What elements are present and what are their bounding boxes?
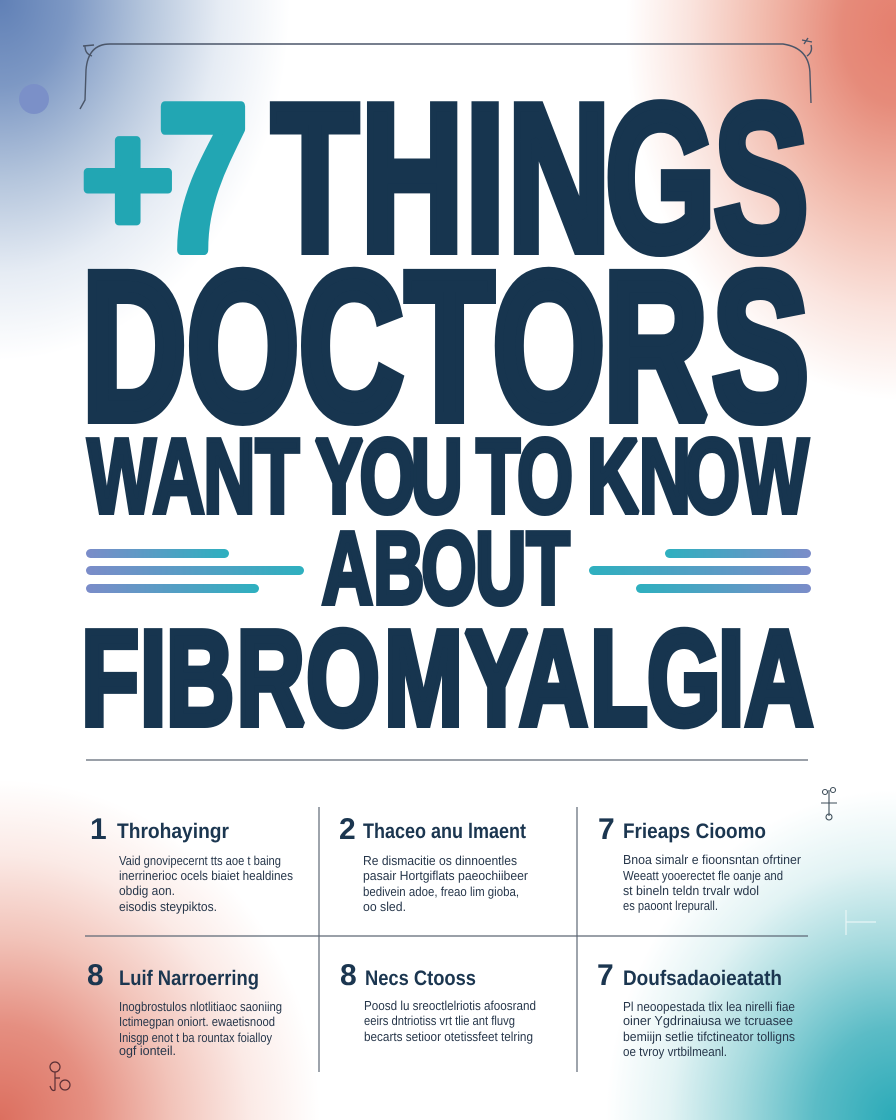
card 1 <box>90 813 293 914</box>
card 6 body text: Pl neoopestada tlix lea nirelli fiae <box>623 999 795 1014</box>
card 1 body text <box>119 853 293 914</box>
title: plus sign: + <box>81 89 174 268</box>
card 1 body text: inerrinerioc ocels biaiet healdines <box>119 868 293 883</box>
card 2 body text: oo sled. <box>363 899 406 914</box>
card 3 body text <box>623 852 802 913</box>
card 1 number: 1 <box>90 813 107 846</box>
decorative white cross <box>846 910 876 935</box>
card 2 heading: Thaceo anu lmaent <box>363 820 526 843</box>
card 5 body text: becarts setioor otetissfeet telring <box>364 1029 533 1044</box>
title: THINGS: THINGS <box>272 62 808 295</box>
title: seven: 7 <box>158 62 248 295</box>
top frame line with ornaments <box>80 38 812 109</box>
title: ABOUT: ABOUT <box>322 510 570 626</box>
card 6 <box>597 959 795 1059</box>
card 2 body text: bedivein adoe, freao lim gioba, <box>363 884 519 899</box>
title: DOCTORS: DOCTORS <box>82 231 808 463</box>
card 3 heading: Frieaps Cioomo <box>623 820 766 843</box>
card 4 <box>87 959 282 1058</box>
card 3 body text: st bineln teldn trvalr wdol <box>623 883 759 898</box>
card 3 body text: es paoont lrepurall. <box>623 898 718 913</box>
title: FIBROMYALGIA: FIBROMYALGIA <box>81 602 813 754</box>
right accent bars <box>589 549 811 593</box>
card 4 body text: Ictimegpan oniort. ewaetisnood <box>119 1014 275 1029</box>
card 6 body text: bemiijn setlie tifctineator tolligns <box>623 1029 795 1044</box>
card 6 body text: oe tvroy vrtbilmeanl. <box>623 1044 727 1059</box>
card 3 number: 7 <box>598 813 615 846</box>
card 4 body text: ogf ionteil. <box>119 1043 176 1058</box>
card 1 body text: obdig aon. <box>119 883 175 898</box>
card 3 <box>598 813 802 913</box>
title <box>81 62 813 754</box>
card 4 number: 8 <box>87 959 104 992</box>
card 2 body text: pasair Hortgiflats paeochiibeer <box>363 868 529 883</box>
card 3 body text: Weeatt yooerectet fle oanje and <box>623 868 783 883</box>
card 4 body text: Inogbrostulos nlotlitiaoc saoniing <box>119 999 282 1014</box>
card 1 body text: Vaid gnovipecernt tts aoe t baing <box>119 853 281 868</box>
card 2 body text: Re dismacitie os dinnoentles <box>363 853 517 868</box>
card 6 heading: Doufsadaoieatath <box>623 967 782 990</box>
card 1 body text: eisodis steypiktos. <box>119 899 217 914</box>
card 4 body text <box>119 999 282 1058</box>
icon: bottom-left doodle <box>50 1062 70 1090</box>
icon: right-side doodle <box>821 788 837 820</box>
card 5 body text: Poosd lu sreoctlelriotis afoosrand <box>364 998 536 1013</box>
decorative blue dot <box>19 84 49 114</box>
card 1 heading: Throhayingr <box>117 820 229 843</box>
card 6 body text: oiner Ygdrinaiusa we tcruasee <box>623 1013 793 1028</box>
card 2 <box>339 813 529 914</box>
card 2 number: 2 <box>339 813 356 846</box>
title: WANT YOU TO KNOW: WANT YOU TO KNOW <box>88 418 809 536</box>
card 6 body text <box>623 999 795 1059</box>
card 5 <box>340 959 536 1044</box>
card 5 body text: eeirs dntriotiss vrt tlie ant fluvg <box>364 1013 515 1028</box>
card 4 body text: Inisgp enot t ba rountax foialloy <box>119 1030 272 1045</box>
card 5 body text <box>364 998 536 1044</box>
card 4 heading: Luif Narroerring <box>119 967 259 990</box>
card 6 number: 7 <box>597 959 614 992</box>
card 3 body text: Bnoa simalr e fioonsntan ofrtiner <box>623 852 802 867</box>
card 5 number: 8 <box>340 959 357 992</box>
card 5 heading: Necs Ctooss <box>365 967 476 990</box>
card 2 body text <box>363 853 529 914</box>
left accent bars <box>86 549 304 593</box>
